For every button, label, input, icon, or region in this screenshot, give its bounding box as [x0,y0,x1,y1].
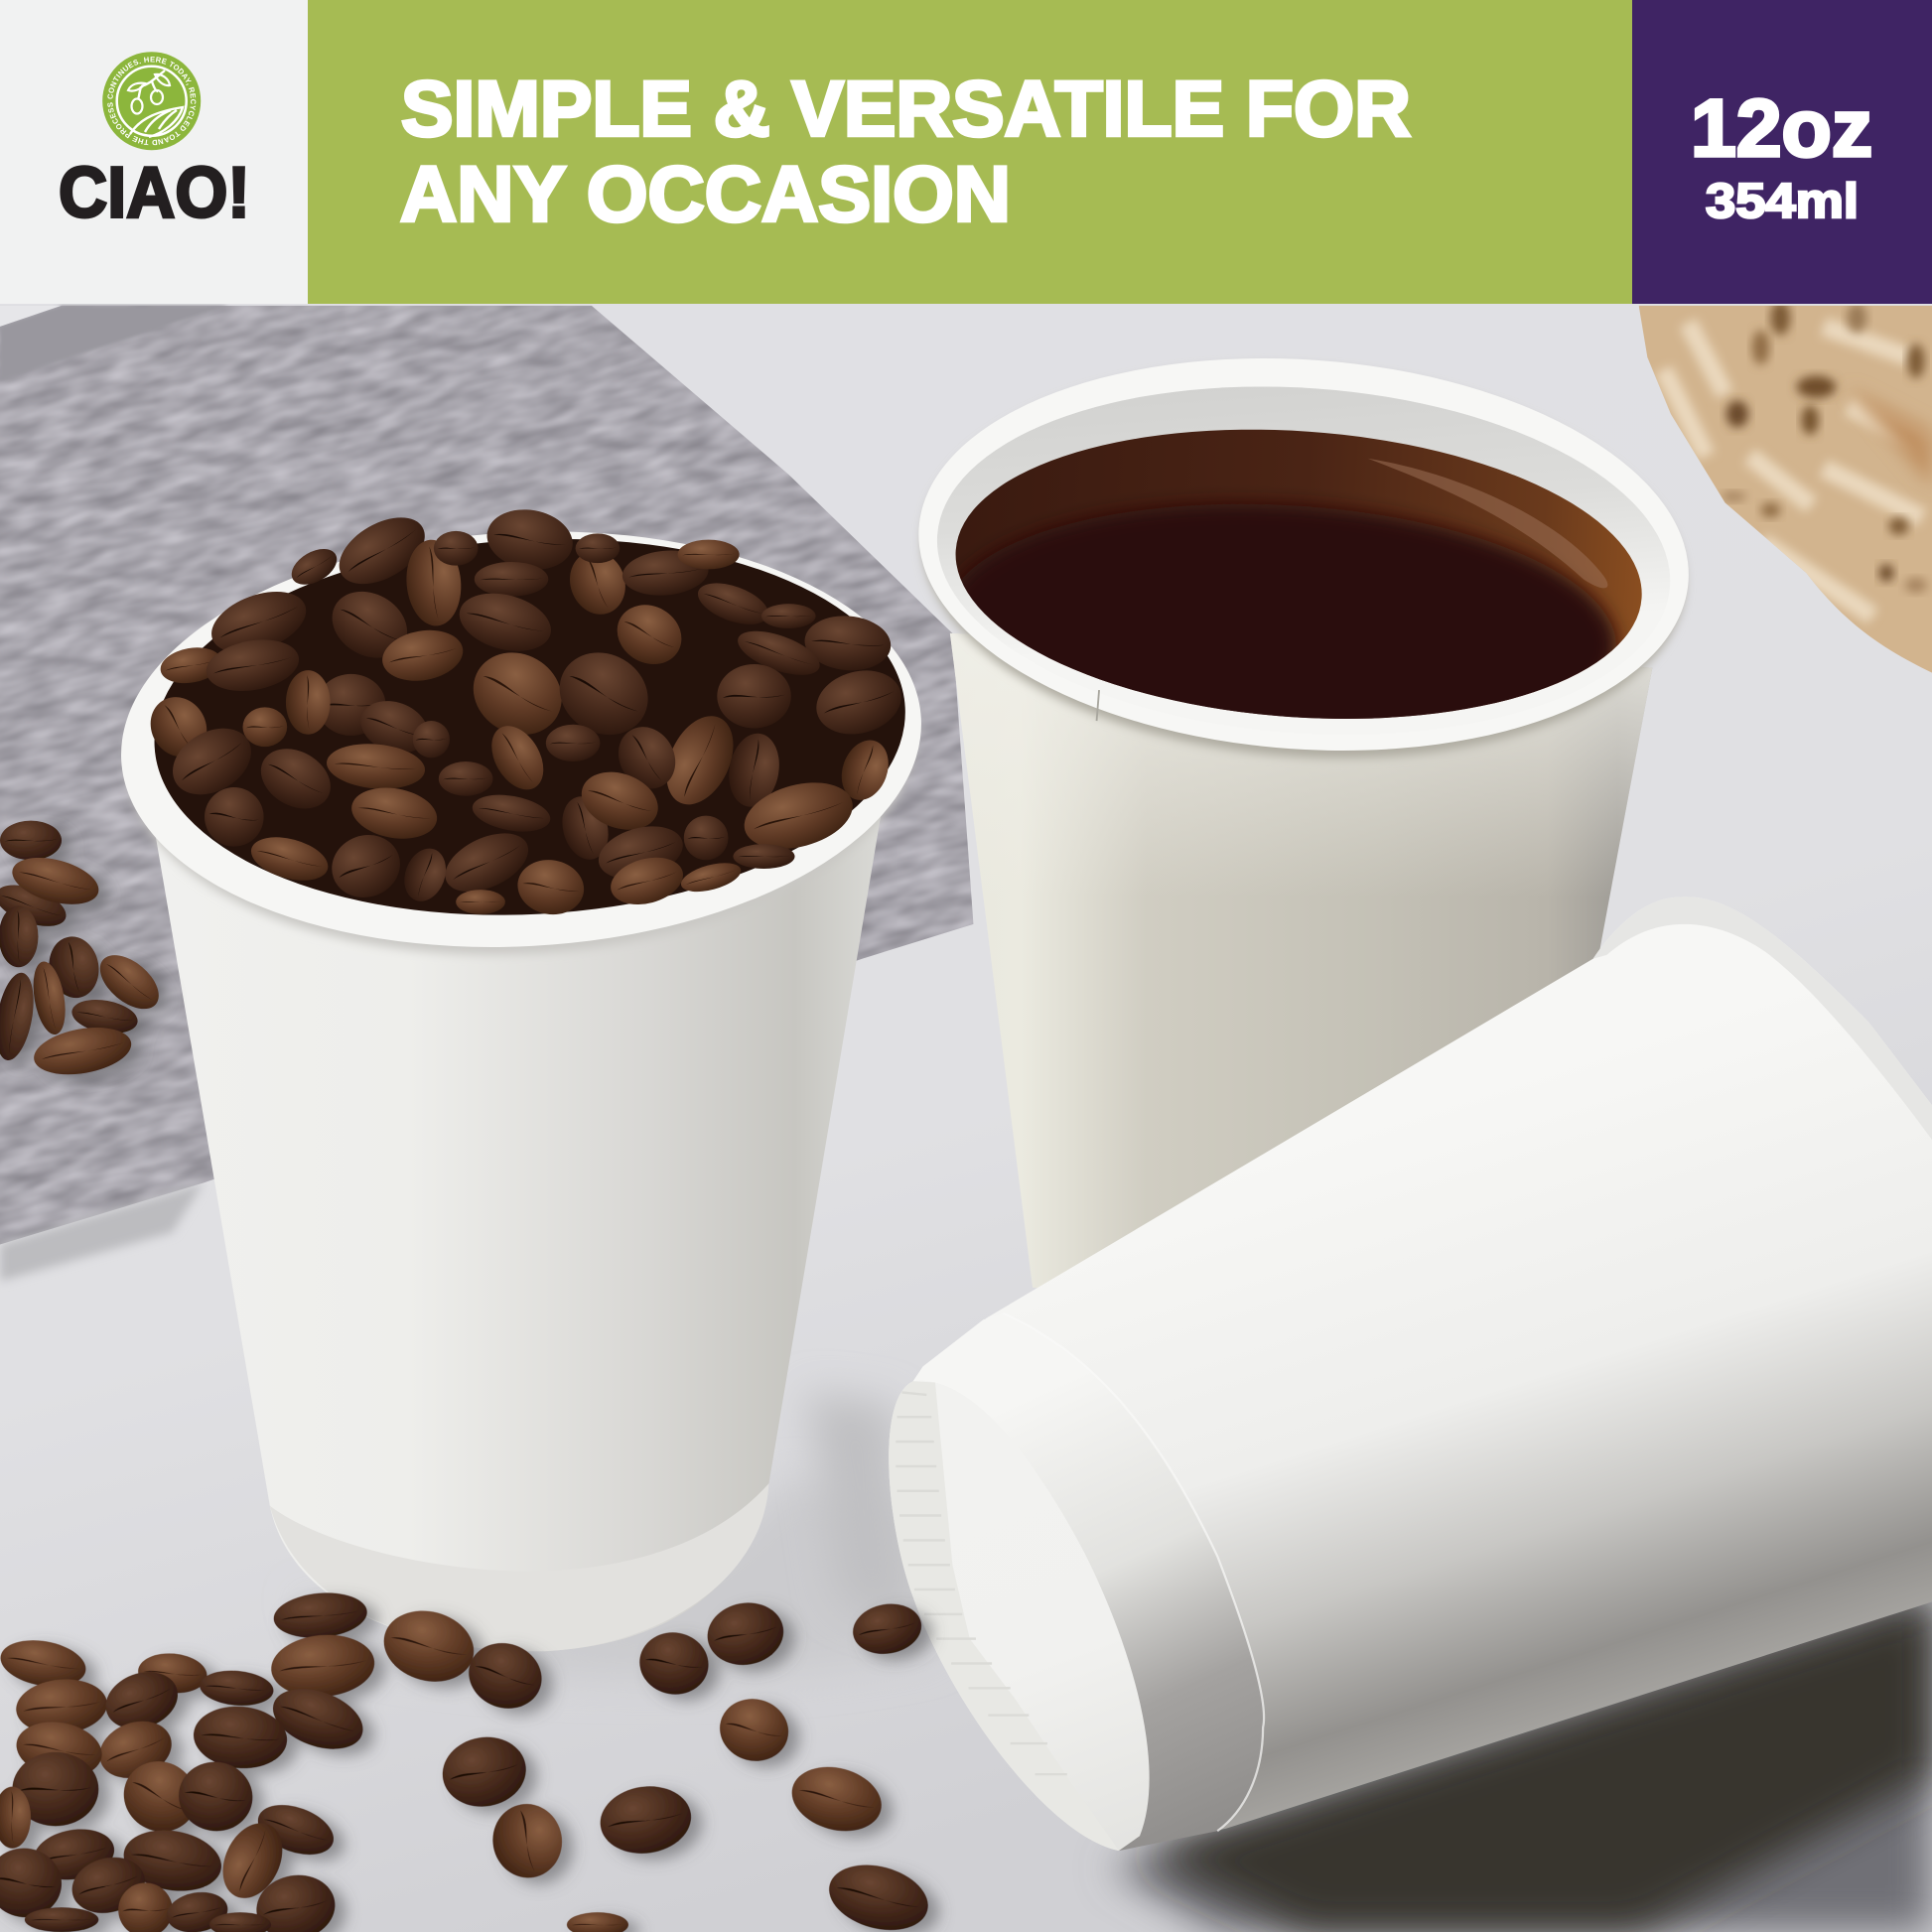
logo wordmark: CIAO! [59,153,250,232]
base band [913,1313,1264,1851]
left cup filled with beans [110,503,932,1651]
cup rim band [1593,897,1932,1140]
title: SIMPLE & VERSATILE FOR [401,64,1411,153]
right cup with black coffee [905,334,1702,1294]
grey knit towel [0,304,973,1245]
size in millilitres: 354ml [1706,175,1859,228]
beans on towel, left [0,821,169,1081]
size in ounces: 12oz [1691,83,1872,174]
header: purple size badge [1632,0,1932,304]
beans on table [0,1589,935,1932]
ribbed inner rim [889,1381,1119,1851]
header: logo panel [0,0,308,304]
coffee surface [955,429,1642,719]
base opening [889,1381,1150,1851]
bean pile in left cup [140,503,915,933]
header: green title band [308,0,1632,304]
woven mat [1626,296,1932,678]
lying cup [889,897,1932,1851]
table shadows [0,1182,1932,1932]
title: ANY OCCASION [400,149,1011,238]
